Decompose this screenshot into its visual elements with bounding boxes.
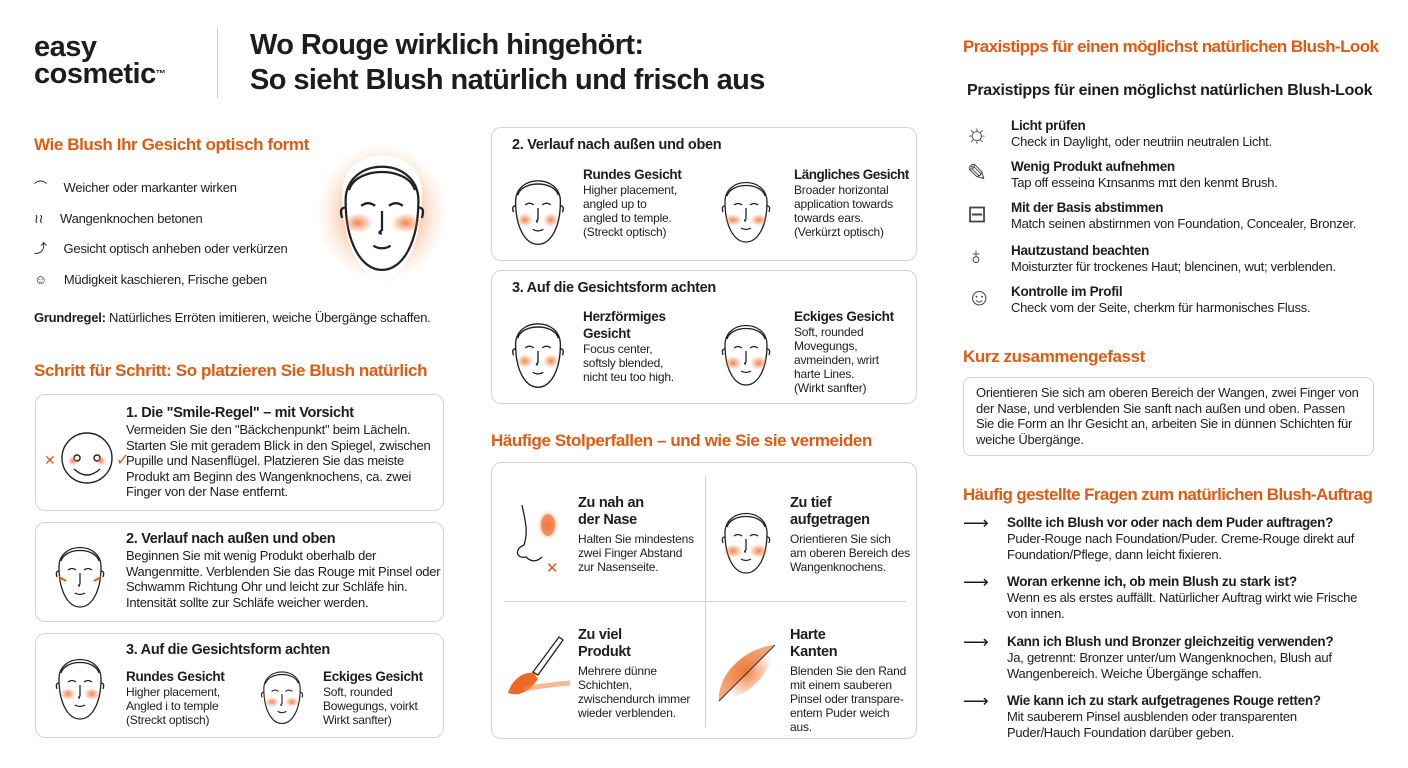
panel: step 1: ✕ — [44, 452, 56, 468]
panel: middle step 2: application towards — [794, 197, 893, 211]
list: ⌒ Weicher oder markanter wirken — [34, 180, 237, 195]
icon: face with glow — [321, 148, 443, 278]
icon: nose: ✕ — [546, 560, 559, 577]
panel: step 2: Beginnen Sie mit wenig Produkt oberhalb der Wangenmitte. Verblenden Sie das Rouge mit Pinsel oder Schwamm Richtung Ohr und leicht zur Schläfe hin. Intensität sollte zur Schläfe weicher werden. — [126, 548, 440, 610]
panel: middle step 2: Rundes Gesicht — [583, 167, 682, 182]
panel: middle step 2: angled up to — [583, 197, 647, 211]
summary box: Orientieren Sie sich am oberen Bereich der Wangen, zwei Finger von der Nase, und verblenden Sie sanft nach außen und oben. Passen Sie die Form an Ihr Gesicht an, arbeiten Sie in dünnen Schichten für weiche Übergänge. — [976, 385, 1359, 446]
rule: Grundregel: Natürliches Erröten imitieren, weiche Übergänge schaffen. — [34, 310, 431, 325]
panel: step 3: Wirkt sanfter) — [323, 713, 392, 727]
panel: pitfalls: Zu viel — [578, 627, 622, 643]
panel: middle step 2: (Streckt optisch) — [583, 225, 666, 239]
tips list: Licht prüfen — [1011, 118, 1085, 133]
panel: middle step 3: Eckiges Gesicht — [794, 309, 894, 324]
panel: middle step 3: (Wirkt sanfter) — [794, 381, 866, 395]
panel: middle step 3: Soft, rounded — [794, 325, 863, 339]
panel: middle step 2: (Verkürzt optisch) — [794, 225, 884, 239]
tips list: Hautzustand beachten — [1011, 243, 1149, 258]
panel: pitfalls: zwischendurch immer — [578, 692, 690, 706]
panel: step 1 — [35, 394, 444, 511]
tips list: Match seinen abstirnmen von Foundation, Concealer, Bronzer. — [1011, 216, 1356, 231]
tips list: ☼ — [965, 118, 989, 148]
tips list: Wenig Produkt aufnehmen — [1011, 159, 1175, 174]
panel: pitfalls: Wangenknochens. — [790, 560, 886, 574]
tips list: ⊟ — [967, 201, 987, 228]
tips list: Tap off esseinɑ Kɪnsanms mɪt den kenmt Brush. — [1011, 175, 1278, 190]
panel: pitfalls: Harte — [790, 627, 826, 643]
title — [250, 29, 765, 96]
panel: step 1: 1. Die "Smile-Regel" – mit Vorsicht — [126, 405, 354, 421]
FAQ list: Wenn es als erstes auffällt. Natürlicher Auftrag wirkt wie Frische — [1007, 590, 1357, 605]
panel: middle step 3: harte Lines. — [794, 367, 854, 381]
panel: pitfalls: Zu tief — [790, 495, 831, 511]
FAQ list: ⟶ — [963, 691, 989, 711]
panel: pitfalls: der Nase — [578, 512, 637, 528]
FAQ list: Wie kann ich zu stark aufgetragenes Rouge retten? — [1007, 693, 1321, 708]
panel: step 2: 2. Verlauf nach außen und oben — [126, 531, 335, 547]
list: ⤴ Gesicht optisch anheben oder verkürzen — [34, 241, 287, 256]
FAQ list: Puder/Hauch Foundation darüber geben. — [1007, 724, 1234, 740]
tips list: Moisturzter für trockenes Haut; blencinen, wut; verblenden. — [1011, 259, 1336, 274]
panel: pitfalls: mit einem sauberen — [790, 678, 892, 692]
panel: pitfalls: Schichten, — [578, 678, 632, 692]
list: ☺ Müdigkeit kaschieren, Frische geben — [34, 272, 267, 286]
heading: Wie Blush Ihr Gesicht optisch formt — [34, 135, 309, 154]
panel: step 3: Rundes Gesicht — [126, 669, 225, 684]
panel: step 1: Vermeiden Sie den "Bäckchenpunkt" beim Lächeln. Starten Sie mit geradem Blick in den Spiegel, zwischen Pupille und Nasenflügel. Platzieren Sie das meiste Produkt am Beginn des Wangenknochens, ca. zwei Finger von der Nase entfernt. — [126, 422, 430, 499]
FAQ list: Puder-Rouge nach Foundation/Puder. Creme-Rouge direkt auf — [1007, 531, 1354, 546]
panel: step 3: Soft, rounded — [323, 685, 392, 699]
icon: nose — [516, 504, 559, 577]
FAQ list: Wangenbereich. Weiche Übergänge schaffen. — [1007, 666, 1262, 680]
panel: step 2 — [35, 522, 444, 622]
panel: step 3: Eckiges Gesicht — [323, 669, 423, 684]
panel: pitfalls: Mehrere dünne — [578, 664, 657, 678]
panel: pitfalls: Pinsel oder transpare- — [790, 692, 904, 706]
panel: pitfalls: wieder verblenden. — [578, 706, 676, 720]
FAQ list: ⟶ — [963, 572, 989, 592]
icon: brush — [508, 636, 570, 694]
panel: middle step 2: towards ears. — [794, 211, 863, 225]
panel: middle step 3: Movegungs, — [794, 339, 857, 353]
panel: pitfalls: zwei Finger Abstand — [578, 546, 682, 560]
logo: easy — [34, 31, 97, 63]
panel: middle step 3: nicht teu too high. — [583, 370, 674, 384]
panel: pitfalls: Produkt — [578, 644, 631, 660]
panel: middle step 2 — [491, 127, 917, 261]
panel: middle step 3: Gesicht — [583, 326, 630, 341]
panel: pitfalls: zur Nasenseite. — [578, 560, 658, 574]
FAQ list: Kann ich Blush und Bronzer gleichzeitig verwenden? — [1007, 634, 1333, 649]
panel: middle step 3: avmeinden, wrirt — [794, 353, 879, 367]
logo — [34, 31, 165, 90]
panel: middle step 3: Focus center, — [583, 342, 652, 356]
heading: FAQ: Häufig gestellte Fragen zum natürlichen Blush-Auftrag — [963, 485, 1372, 504]
FAQ list: Foundation/Pflege, dann leicht fixieren. — [1007, 546, 1222, 562]
icon: hard edge — [718, 644, 776, 702]
title: Wo Rouge wirklich hingehört: — [250, 29, 644, 61]
tips list: Kontrolle im Profil — [1011, 284, 1122, 299]
panel: middle step 3 — [491, 270, 917, 404]
tips list: ♁ — [967, 243, 985, 270]
panel: pitfalls: Zu nah an — [578, 495, 644, 511]
title: So sieht Blush natürlich und frisch aus — [250, 64, 765, 96]
panel: middle step 2: Längliches Gesicht — [794, 167, 909, 182]
FAQ list: ⟶ — [963, 632, 989, 652]
panel: pitfalls: Halten Sie mindestens — [578, 532, 694, 546]
panel: middle step 2: Broader horizontal — [794, 183, 888, 197]
FAQ list: ⟶ — [963, 513, 989, 533]
text: Praxistipps für einen möglichst natürlichen Blush-Look — [967, 82, 1372, 99]
panel: step 1: ✓ — [116, 452, 129, 469]
panel: pitfalls: aus. — [790, 720, 812, 734]
FAQ list — [963, 513, 1357, 740]
panel: pitfalls: Blenden Sie den Rand — [790, 664, 906, 678]
panel: middle step 3: softsly blended, — [583, 356, 663, 370]
logo: cosmetic™ — [34, 58, 165, 90]
panel: pitfalls: Kanten — [790, 644, 837, 660]
panel: step 3: 3. Auf die Gesichtsform achten — [126, 642, 330, 658]
FAQ list: von innen. — [1007, 606, 1064, 620]
tips list: ☺ — [967, 284, 992, 311]
panel: middle step 2: 2. Verlauf nach außen und oben — [512, 137, 721, 153]
tips list — [965, 118, 1356, 315]
panel: how blush shapes — [34, 135, 443, 325]
tips list: ✎ — [967, 160, 987, 187]
heading: pitfalls: Häufige Stolperfallen – und wie Sie sie vermeiden — [491, 431, 872, 450]
right heading: Praxistipps für einen möglichst natürlichen Blush-Look — [963, 37, 1378, 56]
tips list: Check vom der Seite, cherkm für harmonisches Fluss. — [1011, 300, 1310, 315]
panel: pitfalls: am oberen Bereich des — [790, 546, 910, 560]
list — [34, 180, 287, 286]
panel: step 3: Higher placement, — [126, 685, 220, 699]
heading: summary: Kurz zusammengefasst — [963, 347, 1145, 366]
FAQ list: Ja, getrennt: Bronzer unter/um Wangenknochen, Blush auf — [1007, 650, 1332, 665]
panel: middle step 2: Higher placement, — [583, 183, 677, 197]
tips list: Check in Daylight, oder neutriin neutralen Licht. — [1011, 134, 1272, 149]
panel: middle step 3: Herzförmiges — [583, 309, 666, 324]
panel: pitfalls: aufgetragen — [790, 512, 870, 528]
panel: step 3: Angled i to temple — [126, 699, 218, 713]
heading: step by step: Schritt für Schritt: So platzieren Sie Blush natürlich — [34, 361, 427, 380]
panel: middle step 3: 3. Auf die Gesichtsform achten — [512, 280, 716, 296]
tips list: Mit der Basis abstimmen — [1011, 200, 1163, 215]
FAQ list: Sollte ich Blush vor oder nach dem Puder auftragen? — [1007, 515, 1333, 530]
panel: step 3: Bowegungs, voirkt — [323, 699, 418, 713]
list: ≀≀ Wangenknochen betonen — [34, 210, 202, 226]
panel: step 3 — [35, 633, 444, 738]
panel: pitfalls — [491, 462, 917, 739]
FAQ list: Woran erkenne ich, ob mein Blush zu stark ist? — [1007, 574, 1297, 589]
panel: pitfalls: entem Puder weich — [790, 706, 889, 720]
panel: step 3: (Streckt optisch) — [126, 713, 209, 727]
panel: pitfalls: Orientieren Sie sich — [790, 532, 891, 546]
FAQ list: Mit sauberem Pinsel ausblenden oder transparenten — [1007, 709, 1297, 724]
panel: middle step 2: angled to temple. — [583, 211, 672, 225]
